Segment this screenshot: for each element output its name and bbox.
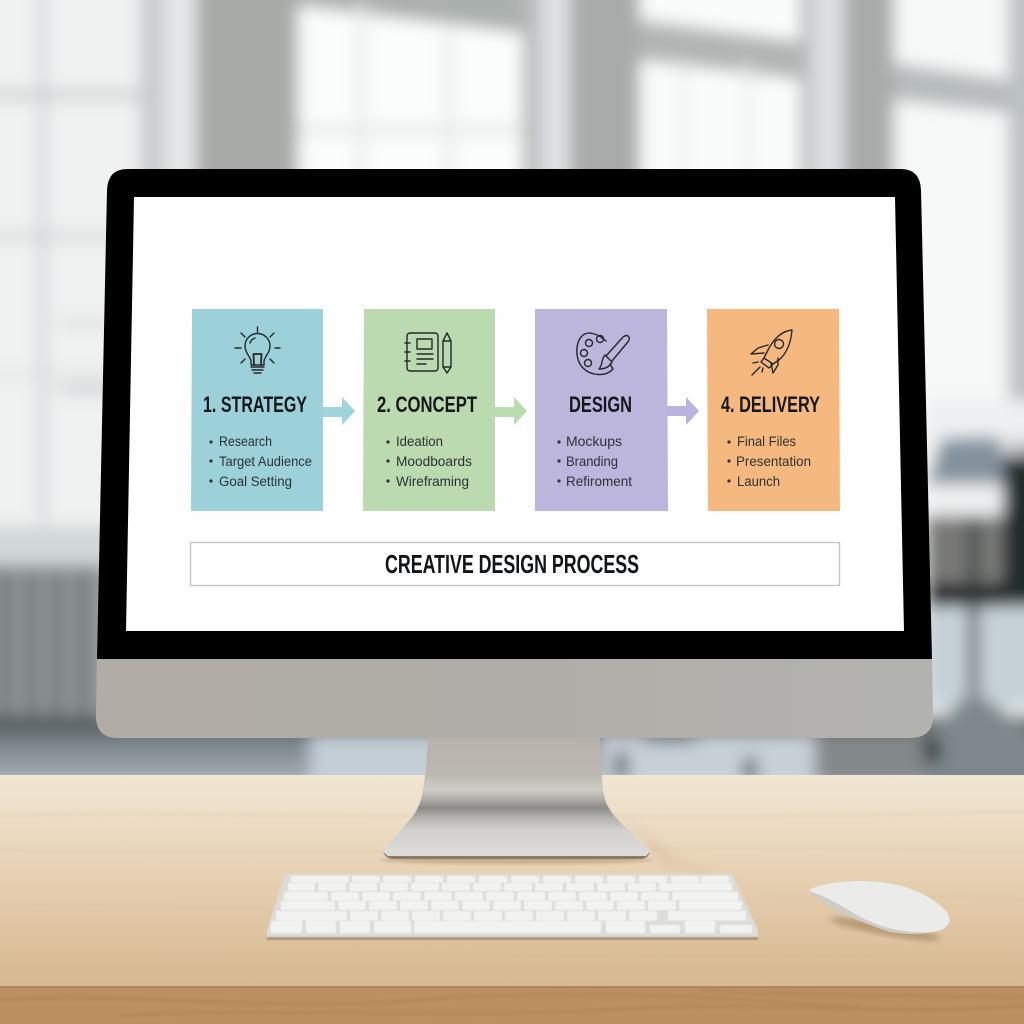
bullet list [209,433,312,489]
bullet list: Branding [566,453,618,469]
window mullions [298,0,750,200]
row 3 [284,892,738,900]
card 3: design [535,309,668,511]
arrow 3 [667,397,699,425]
bullet list: Target Audience [219,453,312,469]
wooden desk [0,775,1024,1024]
floor blobs behind stand [615,752,627,780]
bullet list: Research [219,433,272,449]
black bezel [97,169,932,659]
icon: light bulb [235,327,280,373]
row 2 [288,883,732,891]
monitor chin [96,655,933,738]
white screen [126,197,904,631]
bullet list: Goal Setting [219,473,292,489]
bullet list [557,433,632,489]
mouse [809,881,950,945]
arrow 2 [495,397,527,425]
title bar: CREATIVE DESIGN PROCESS [385,549,639,579]
card 1: strategy [191,309,323,511]
monitor [96,169,933,738]
bullet list [386,433,472,489]
row 4 [281,901,742,910]
row 6 [271,921,752,933]
heading: 4. DELIVERY [721,392,820,417]
bullet list: Wireframing [396,473,469,489]
icon: palette and brush [577,333,629,375]
arrow 1 [323,397,355,425]
desk front edge [0,986,1024,1024]
monitor stand [380,738,652,864]
floor [0,716,1024,786]
icon: rocket [751,330,792,375]
heading: 2. CONCEPT [377,392,477,417]
heading: DESIGN [569,392,632,417]
bullet list: Final Files [737,433,796,449]
heading: 1. STRATEGY [203,392,307,417]
row 5 [276,911,746,920]
bullet list [727,433,811,489]
row 1 [291,876,729,882]
bullet list: Moodboards [396,453,472,469]
soft shadow on desk [620,815,740,880]
bullet list: Refiroment [566,473,632,489]
bullet list: Mockups [566,433,622,449]
bullet list: Launch [737,473,780,489]
card 4: delivery [707,309,840,511]
blurred office background [0,0,1024,790]
right office furniture [925,400,1024,440]
bullet list: Ideation [396,433,443,449]
keyboard [267,874,758,940]
bullet list: Presentation [736,453,811,469]
title bar [190,542,840,586]
radiator [0,565,110,720]
icon: notebook and pencil [405,333,451,373]
card 2: concept [363,309,495,511]
